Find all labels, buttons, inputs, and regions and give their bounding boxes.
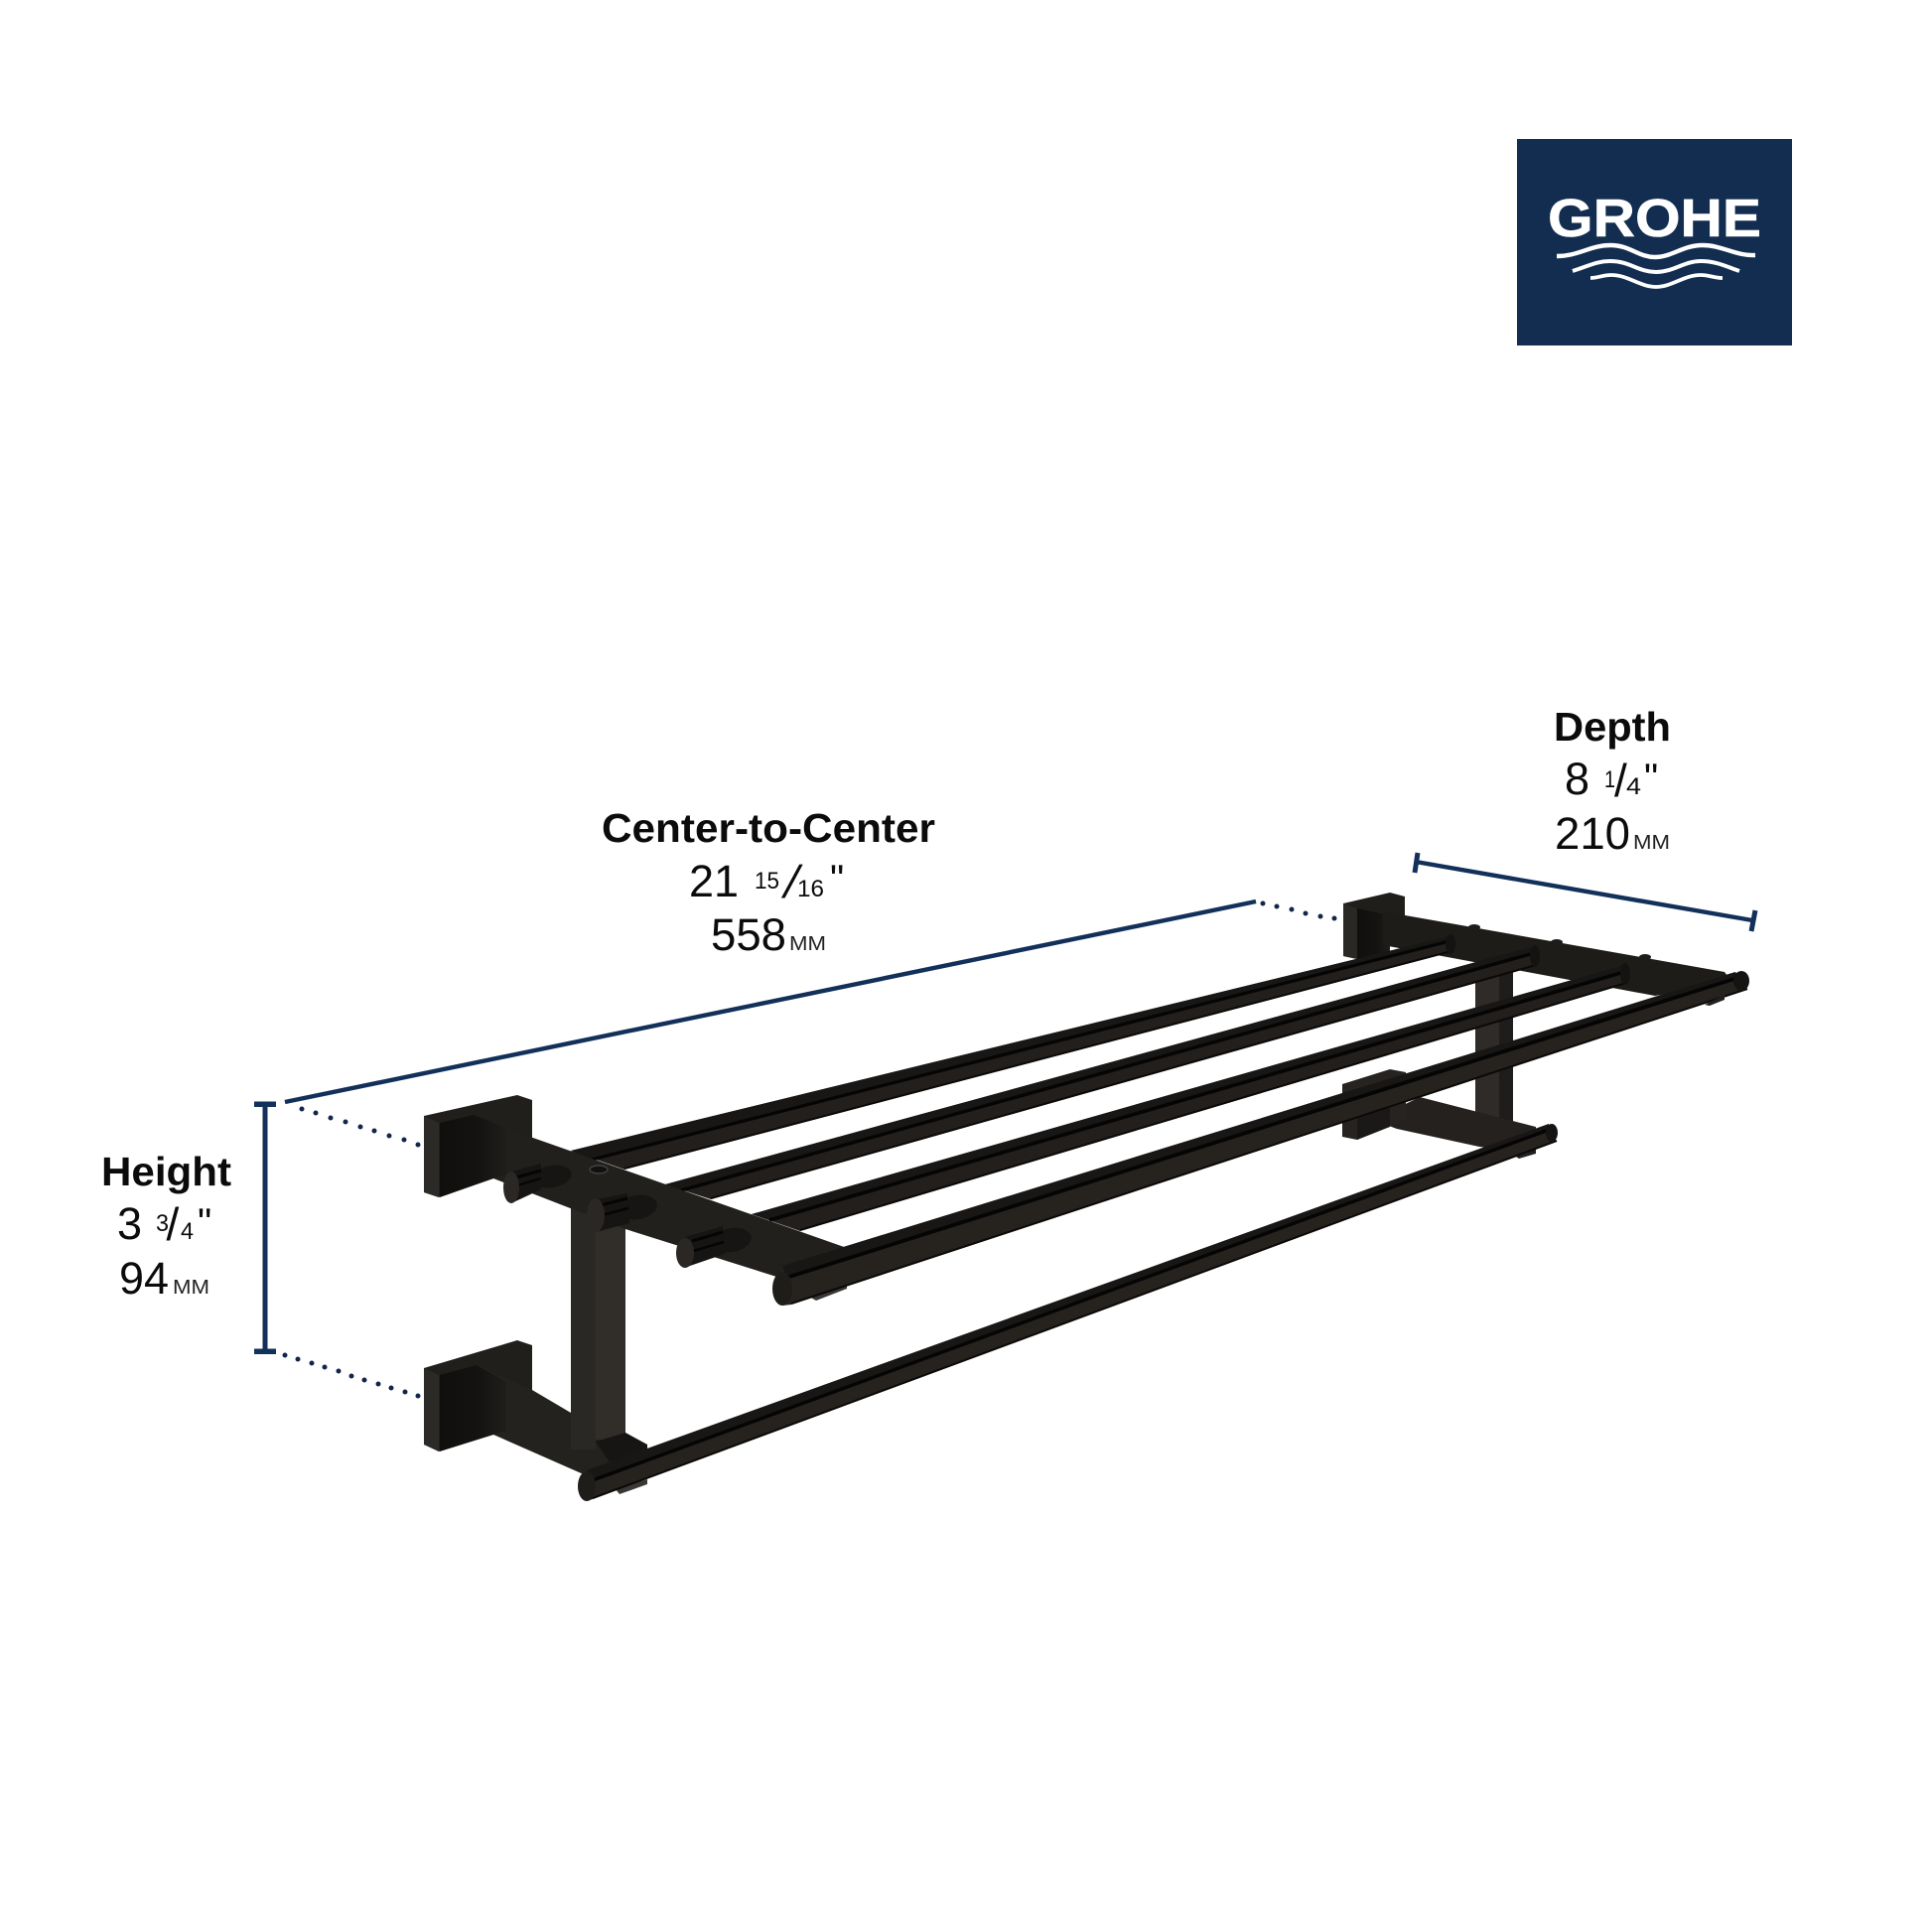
label: center-to-center: 21 — [689, 856, 739, 906]
upper rods 1-3 — [571, 934, 1630, 1231]
logo: GROHE — [1517, 139, 1792, 345]
label: depth: Depth — [1554, 704, 1671, 750]
peg 2 — [587, 1192, 659, 1232]
far upper bar — [1383, 911, 1732, 996]
label: depth: / — [1614, 755, 1627, 806]
label: depth: MM — [1633, 832, 1670, 854]
far foot — [1705, 995, 1725, 1006]
label: depth: 1 — [1604, 766, 1615, 793]
post lower part over arm — [571, 1405, 625, 1449]
far lower plate and arm — [1342, 1069, 1536, 1154]
label: center-to-center: 16 — [797, 876, 824, 902]
label: height: 3 — [156, 1210, 169, 1237]
label: height: Height — [101, 1149, 231, 1194]
dimension: height bar — [254, 1102, 421, 1398]
label: center-to-center: Center-to-Center — [602, 805, 935, 851]
lower towel rod — [578, 1124, 1558, 1501]
logo waves — [1557, 245, 1755, 287]
dimension: center-to-center line — [285, 901, 1336, 1102]
peg 1 — [503, 1163, 574, 1203]
label: height: MM — [173, 1277, 209, 1299]
label: depth: 4 — [1626, 773, 1641, 800]
label: height: / — [167, 1198, 179, 1250]
label: depth: " — [1644, 757, 1658, 800]
label: height: 3 — [117, 1198, 142, 1249]
label: center-to-center: MM — [789, 933, 826, 955]
label: depth: 210 — [1555, 808, 1630, 859]
label: depth: 8 — [1565, 754, 1589, 804]
near lower plate — [424, 1340, 532, 1451]
far upper plate — [1343, 893, 1405, 959]
logo wordmark: GROHE — [1548, 189, 1761, 248]
near post — [571, 1201, 625, 1445]
label: height: 94 — [119, 1253, 169, 1304]
arm shadow on plate — [440, 1115, 506, 1197]
label: center-to-center — [602, 805, 935, 960]
label: height: " — [198, 1201, 211, 1245]
label: center-to-center: 558 — [711, 909, 786, 960]
leader dots to far plate — [1261, 901, 1336, 921]
label: depth — [1554, 704, 1671, 859]
screw — [590, 1166, 608, 1173]
arm shadow — [440, 1365, 506, 1451]
dimension: depth line — [1415, 853, 1755, 931]
foot under front rod — [809, 1286, 847, 1301]
base block — [596, 1433, 647, 1471]
near lower arm — [477, 1365, 647, 1475]
far post — [1475, 968, 1513, 1125]
peg 3 — [676, 1225, 754, 1268]
label: height — [101, 1149, 231, 1304]
towel rack product — [424, 893, 1749, 1501]
lower foot — [616, 1479, 647, 1494]
height leader dots — [282, 1106, 421, 1398]
front upper rod — [772, 971, 1749, 1306]
label: center-to-center: " — [830, 858, 844, 901]
near upper plate — [424, 1095, 532, 1197]
near upper arm — [474, 1117, 847, 1281]
label: height: 4 — [181, 1218, 194, 1245]
label: center-to-center: / — [778, 857, 805, 907]
label: center-to-center: 15 — [755, 868, 779, 895]
